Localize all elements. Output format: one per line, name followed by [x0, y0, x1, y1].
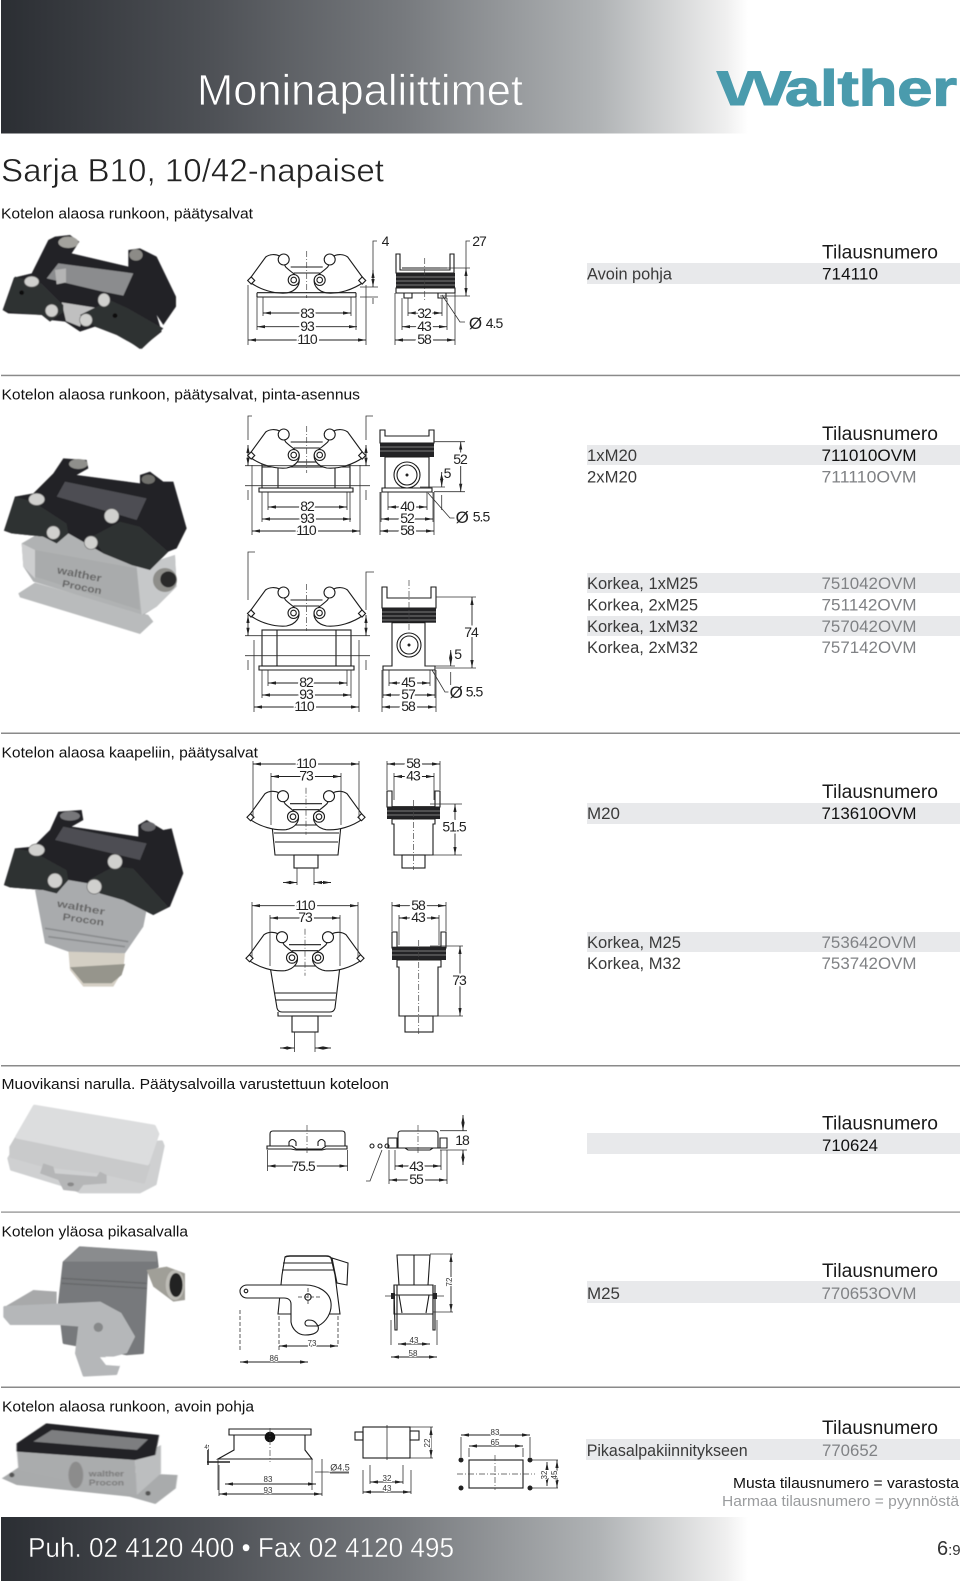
order table: high cable: 753642OVM — [822, 933, 916, 952]
order table: high variants: 751142OVM — [822, 596, 916, 614]
drawing: hood with latch, side: 73 — [308, 1339, 317, 1348]
drawing: side view, cable high: 58 — [411, 897, 426, 913]
drawing: side view, low: 5.5 — [473, 509, 490, 525]
order table: high cable: 753742OVM — [822, 954, 916, 973]
order table: cover: 710624 — [822, 1136, 878, 1155]
panel: plastic cover — [2, 1076, 960, 1192]
photo: surface mounted housing — [4, 458, 187, 634]
drawing: side view dimensions: Ø — [469, 314, 482, 333]
order table: high variants: 757142OVM — [822, 638, 916, 657]
section heading: Kotelon alaosa runkoon, avoin pohja — [2, 1399, 255, 1416]
drawing: side view dimensions: 4.5 — [486, 315, 503, 331]
order table: open bottom: Pikasalpakiinnitykseen — [587, 1441, 748, 1460]
drawing: open housing front: Ø4.5 — [330, 1463, 350, 1473]
photo: surface mounted housing: Procon — [61, 579, 102, 597]
order table: high variants: Korkea, 2xM32 — [587, 638, 698, 657]
photo: cable housing: walther — [55, 899, 106, 918]
panel: base housing, surface mounting — [2, 386, 960, 714]
order table: high variants: 757042OVM — [822, 617, 916, 636]
drawing: open housing top view: 65 — [491, 1438, 500, 1447]
photo: open bottom housing: walther — [88, 1469, 125, 1479]
photo: open bottom housing: Procon — [89, 1478, 124, 1487]
photo: surface mounted housing: walther — [55, 564, 103, 585]
panel: base housing, bulkhead — [1, 205, 960, 349]
drawing: side view, cable high — [392, 897, 467, 1034]
drawing: front view, cable low — [247, 755, 365, 885]
drawing: side view, cable low: 43 — [406, 768, 421, 784]
drawing: open housing front: 93 — [264, 1486, 273, 1495]
drawing: side view, cable low — [387, 755, 467, 870]
order table: high variants: Korkea, 1xM25 — [587, 574, 698, 593]
drawing: side view dimensions: 43 — [417, 318, 432, 334]
drawing: open housing top view: 32 — [540, 1470, 549, 1479]
drawing: front view, low: 82 — [300, 498, 315, 514]
logo: walther: W — [716, 60, 793, 116]
order table: low variants: 1xM20 — [587, 446, 637, 465]
order table: high variants: Korkea, 2xM25 — [587, 596, 698, 614]
panel: base housing, cable — [2, 745, 960, 1052]
drawing: hood with latch, side — [240, 1256, 348, 1363]
drawing: side view, cable high: 73 — [452, 972, 467, 988]
drawing: cover side view — [366, 1115, 470, 1187]
drawing: cover front view: 75.5 — [291, 1158, 316, 1174]
drawing: side view, high: 5.5 — [466, 684, 483, 700]
order table: Tilausnumero — [822, 242, 938, 264]
order table — [587, 242, 960, 284]
drawing: front view, high: 110 — [294, 698, 315, 714]
section heading: Kotelon alaosa runkoon, päätysalvat — [1, 205, 254, 222]
page number: 6:9 — [937, 1538, 960, 1560]
order table: M20 — [587, 782, 960, 824]
drawing: open housing side: 22 — [423, 1438, 432, 1447]
page header band — [1, 0, 957, 134]
drawing: side view, high: 5 — [454, 646, 462, 662]
drawing: side view, high: 58 — [401, 698, 416, 714]
drawing: front view, low: 93 — [300, 510, 315, 526]
order table: high cable: Korkea, M32 — [587, 954, 681, 973]
drawing: open housing front: 83 — [264, 1475, 273, 1484]
section heading: Kotelon alaosa runkoon, päätysalvat, pinta-asennus — [2, 386, 360, 403]
order table: open bottom: 770652 — [822, 1441, 878, 1460]
order table: high variants: Korkea, 1xM32 — [587, 617, 698, 636]
drawing: side view, cable low: 51.5 — [442, 819, 467, 835]
order table: M20: 713610OVM — [822, 804, 916, 823]
order table: upper housing: 770653OVM — [822, 1284, 916, 1303]
legend: order number colours: Harmaa tilausnumero = pyynnöstä — [722, 1494, 960, 1510]
order table: upper housing: Tilausnumero — [822, 1261, 938, 1282]
drawing: front view dimensions — [248, 233, 390, 347]
drawing: front view, cable high — [246, 897, 364, 1052]
order table: low variants: Tilausnumero — [822, 424, 938, 445]
drawing: side view, low: 52 — [400, 510, 415, 526]
drawing: front view, high: 82 — [299, 674, 314, 690]
drawing: side view, high — [382, 580, 483, 714]
drawing: side view, low: 5 — [444, 465, 452, 481]
order table: open bottom: Tilausnumero — [822, 1418, 938, 1439]
drawing: open housing top view — [457, 1428, 559, 1490]
drawing: front view, high — [245, 552, 374, 714]
drawing: side view, cable low: 58 — [406, 755, 421, 771]
drawing: front view, cable high: 110 — [295, 897, 316, 913]
order table: upper housing: M25 — [587, 1284, 620, 1303]
section heading: Kotelon yläosa pikasalvalla — [2, 1224, 189, 1241]
title: Moninapaliittimet — [197, 66, 523, 115]
drawing: cover side view: 18 — [455, 1132, 470, 1148]
section heading: Kotelon alaosa kaapeliin, päätysalvat — [2, 745, 259, 762]
drawing: front view, cable low: 110 — [296, 755, 317, 771]
drawing: open housing top view: 83 — [491, 1428, 500, 1437]
drawing: front view dimensions: 83 — [300, 305, 315, 321]
logo: walther — [716, 60, 957, 116]
drawing: side view dimensions: 27 — [472, 233, 487, 249]
drawing: side view dimensions — [395, 233, 503, 347]
order table: 714110 — [822, 264, 878, 284]
order table: high cable: Korkea, M25 — [587, 933, 681, 952]
drawing: front view dimensions: 4 — [382, 233, 390, 249]
drawing: side view, low: 52 — [453, 451, 468, 467]
drawing: front view dimensions: 110 — [297, 331, 318, 347]
footer band — [1, 1517, 960, 1581]
photo: open bottom housing — [2, 1423, 178, 1504]
drawing: side view, high: 74 — [464, 624, 479, 640]
drawing: open housing top view: 45 — [550, 1470, 559, 1479]
order table: cover: Tilausnumero — [822, 1114, 938, 1134]
drawing: side view, cable high: 43 — [411, 909, 426, 925]
drawing: side view dimensions: 58 — [417, 331, 432, 347]
drawing: side view, high: 45 — [401, 674, 416, 690]
photo: plastic cover — [9, 1107, 163, 1192]
panel: upper housing with quick latch — [2, 1224, 960, 1375]
drawing: open housing side — [355, 1425, 433, 1494]
photo: connector housing black — [3, 235, 176, 349]
order table: M20: M20 — [587, 804, 620, 823]
order table: low variants — [587, 424, 960, 486]
drawing: open housing side: 32 — [383, 1474, 392, 1483]
drawing: side view, low: 58 — [400, 522, 415, 538]
drawing: hood with latch, front: 58 — [409, 1349, 418, 1358]
logo: walther: alther — [785, 60, 957, 116]
drawing: hood with latch, front — [385, 1254, 454, 1358]
drawing: side view dimensions: 32 — [417, 305, 432, 321]
drawing: front view, cable low: 73 — [299, 768, 314, 784]
panel: base housing, open bottom — [2, 1399, 960, 1510]
order table: upper housing — [587, 1261, 960, 1303]
drawing: front view, low — [245, 416, 373, 538]
legend: order number colours — [722, 1476, 960, 1510]
photo: cable housing: Procon — [62, 912, 105, 929]
drawing: hood with latch, front: 43 — [410, 1336, 419, 1345]
order table: low variants: 711110OVM — [822, 468, 916, 486]
legend: order number colours: Musta tilausnumero = varastosta — [733, 1476, 960, 1492]
section heading: Muovikansi narulla. Päätysalvoilla varustettuun koteloon — [2, 1076, 389, 1093]
order table: Avoin pohja — [587, 264, 673, 284]
order table: low variants: 2xM20 — [587, 468, 637, 486]
order table: low variants: 711010OVM — [822, 446, 916, 465]
drawing: front view, low: 110 — [296, 522, 317, 538]
drawing: open housing side: 43 — [383, 1484, 392, 1493]
drawing: side view, low: 40 — [400, 498, 415, 514]
drawing: side view, low — [380, 430, 490, 538]
order table: high variants: 751042OVM — [822, 574, 916, 593]
drawing: side view, low: Ø — [456, 508, 469, 527]
order table: high variants — [587, 573, 960, 657]
order table: high cable — [587, 932, 960, 973]
drawing: cover side view: 43 — [409, 1158, 424, 1174]
drawing: cover front view — [267, 1125, 348, 1174]
drawing: front view dimensions: 93 — [300, 318, 315, 334]
contact numbers: Puh. 02 4120 400 • Fax 02 4120 495 — [28, 1532, 454, 1563]
photo: upper housing with latch — [5, 1247, 185, 1375]
drawing: hood with latch, side: 86 — [270, 1354, 279, 1363]
main heading: Sarja B10, 10/42-napaiset — [1, 153, 384, 189]
order table: cover — [587, 1114, 960, 1155]
drawing: open housing front — [204, 1428, 350, 1496]
drawing: side view, high: Ø — [450, 683, 463, 702]
drawing: open housing front: 4 — [204, 1445, 208, 1451]
drawing: hood with latch, front: 72 — [445, 1277, 454, 1286]
drawing: side view, high: 57 — [401, 686, 416, 702]
drawing: front view, cable high: 73 — [298, 909, 313, 925]
photo: cable housing — [4, 810, 183, 987]
order table: open bottom — [586, 1418, 960, 1460]
order table: M20: Tilausnumero — [822, 782, 938, 803]
drawing: cover side view: 55 — [409, 1171, 424, 1187]
drawing: front view, high: 93 — [299, 686, 314, 702]
